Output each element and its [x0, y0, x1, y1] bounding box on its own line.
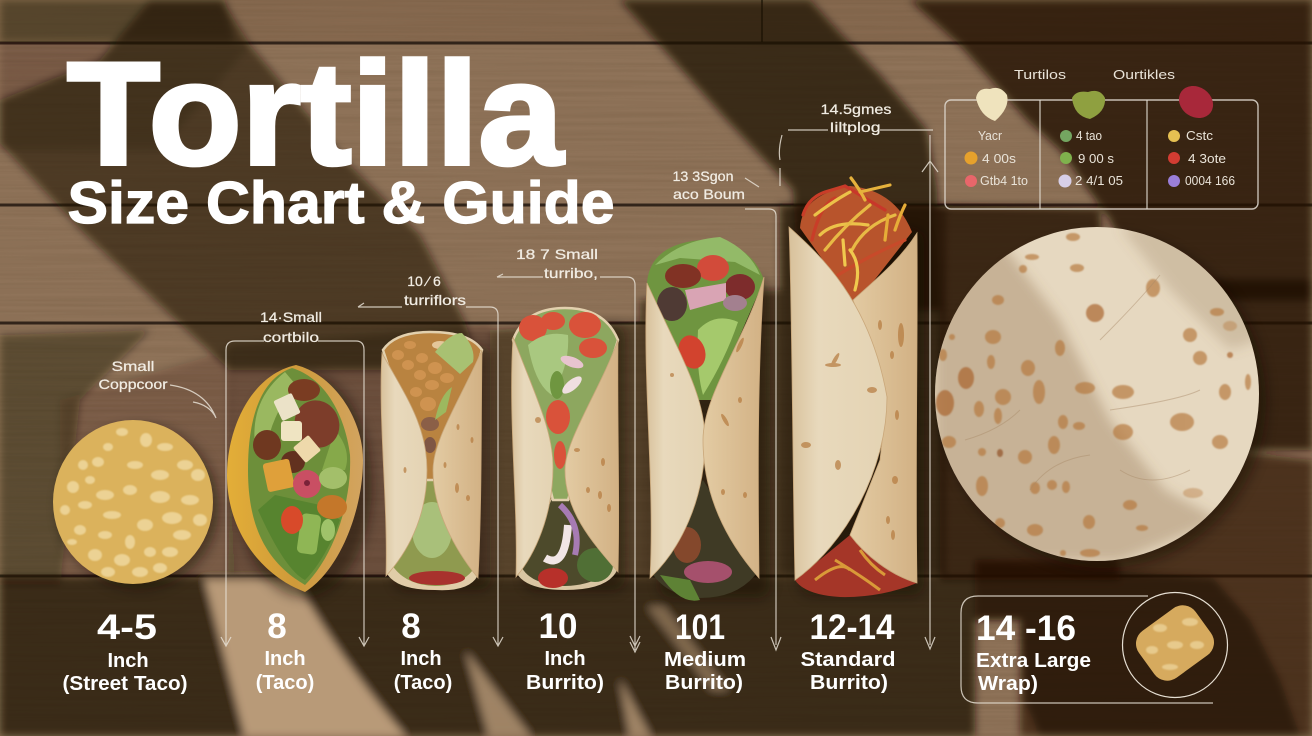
lit wedges along bottom [205, 580, 728, 736]
legend heading two: Ourtikles [1113, 68, 1175, 82]
size caption: 10 inch burrito: 10 [539, 607, 577, 646]
size caption: 8 inch taco: Inch [264, 648, 306, 670]
size caption: extra large wrap: Wrap) [978, 673, 1038, 695]
size caption: 4-5 inch: 4-5 [97, 608, 157, 647]
size caption: extra large wrap: 14 -16 [976, 609, 1076, 648]
legend column one: Yacr [978, 129, 1002, 143]
size caption: 10 inch burrito: Burrito) [526, 672, 604, 694]
size caption: medium burrito: Medium [664, 649, 746, 671]
title line two: Size Chart & Guide [68, 170, 614, 236]
icon: cream corn [976, 88, 1008, 121]
size caption: 8 inch taco second: (Taco) [394, 672, 452, 694]
bracket: burrito 10 inch [497, 274, 640, 652]
street taco tortilla disc [53, 420, 213, 584]
legend column two: 4 tao [1076, 129, 1102, 143]
measurement leader lines [221, 130, 938, 652]
size caption: standard burrito: Standard [800, 649, 896, 671]
title line one: Tortilla [67, 32, 565, 195]
burrito 1 [381, 332, 482, 590]
taco [227, 365, 363, 592]
label: aco boum [672, 168, 745, 202]
size caption: extra large wrap [961, 596, 1213, 703]
size caption: 8 inch taco second: 8 [401, 607, 421, 646]
bracket: medium burrito [745, 178, 781, 650]
icon: red pepper [1173, 79, 1219, 125]
size caption: medium burrito: Burrito) [665, 672, 743, 694]
size caption: medium burrito: 101 [675, 608, 725, 647]
icon: green pepper [1072, 91, 1105, 119]
size caption: 10 inch burrito: Inch [544, 648, 586, 670]
extra large tortilla [935, 227, 1259, 561]
size label: small: Small [112, 358, 154, 374]
size caption: 8 inch taco second: Inch [400, 648, 442, 670]
legend column three: Cstc [1186, 129, 1213, 143]
size caption: 8 inch taco second [394, 607, 452, 694]
label: iltplog [820, 101, 892, 135]
size label: small: Coppcoor [98, 376, 168, 392]
label: iltplog: 14.5gmes [820, 101, 892, 117]
legend column two: 2 4/1 05 [1075, 174, 1123, 188]
legend column one: 4 00s [982, 152, 1016, 166]
label: small turrito: turribo, [544, 265, 598, 281]
label: turriflors [404, 273, 466, 308]
size caption: medium burrito [664, 608, 746, 694]
bracket: taco [221, 341, 369, 646]
label: small tortilla: cortbilo [263, 329, 319, 345]
label: iltplog: Iiltplog [830, 119, 880, 135]
size caption: 8 inch taco: (Taco) [256, 672, 314, 694]
label: small turrito: 18 7 Small [516, 246, 598, 262]
legend column three: 4 3ote [1188, 152, 1226, 166]
size caption: 4-5 inch: (Street Taco) [62, 673, 188, 695]
label: turriflors: 10 ⁄ 6 [407, 273, 441, 289]
label: turriflors: turriflors [404, 292, 466, 308]
label: small tortilla: 14·Small [260, 309, 322, 325]
label: small tortilla [260, 309, 322, 345]
legend column one [964, 129, 1028, 188]
burrito 4 [789, 178, 917, 597]
size caption: 10 inch burrito [526, 607, 604, 694]
size caption: standard burrito: Burrito) [810, 672, 888, 694]
size caption: 4-5 inch: Inch [107, 650, 149, 672]
size caption: standard burrito: 12-14 [810, 608, 895, 647]
size caption: 8 inch taco [256, 607, 314, 694]
size caption: standard burrito [800, 608, 896, 694]
legend heading one: Turtilos [1014, 68, 1066, 82]
title [67, 32, 614, 236]
food shadows [59, 230, 1266, 598]
legend column one: Gtb4 1to [980, 174, 1028, 188]
label: aco boum: aco Boum [673, 186, 745, 202]
size label: small [98, 358, 216, 418]
bracket: burrito small [358, 303, 503, 646]
legend column three [1168, 129, 1235, 188]
burrito 2 [512, 308, 619, 590]
legend table [945, 68, 1258, 209]
bracket: standard burrito [779, 130, 938, 649]
label: small turrito [516, 246, 598, 281]
legend column three: 0004 166 [1185, 174, 1235, 188]
burrito 3 [646, 237, 764, 601]
size caption: 4-5 inch [62, 608, 188, 695]
size labels along leaders [260, 101, 892, 345]
legend column two: 9 00 s [1078, 152, 1114, 166]
legend column two [1058, 129, 1123, 188]
size caption: 8 inch taco: 8 [267, 607, 287, 646]
label: aco boum: 13 3Sgon [672, 168, 734, 184]
icon: wrap chip in circle [1122, 592, 1228, 698]
size caption: extra large wrap: Extra Large [976, 650, 1091, 672]
